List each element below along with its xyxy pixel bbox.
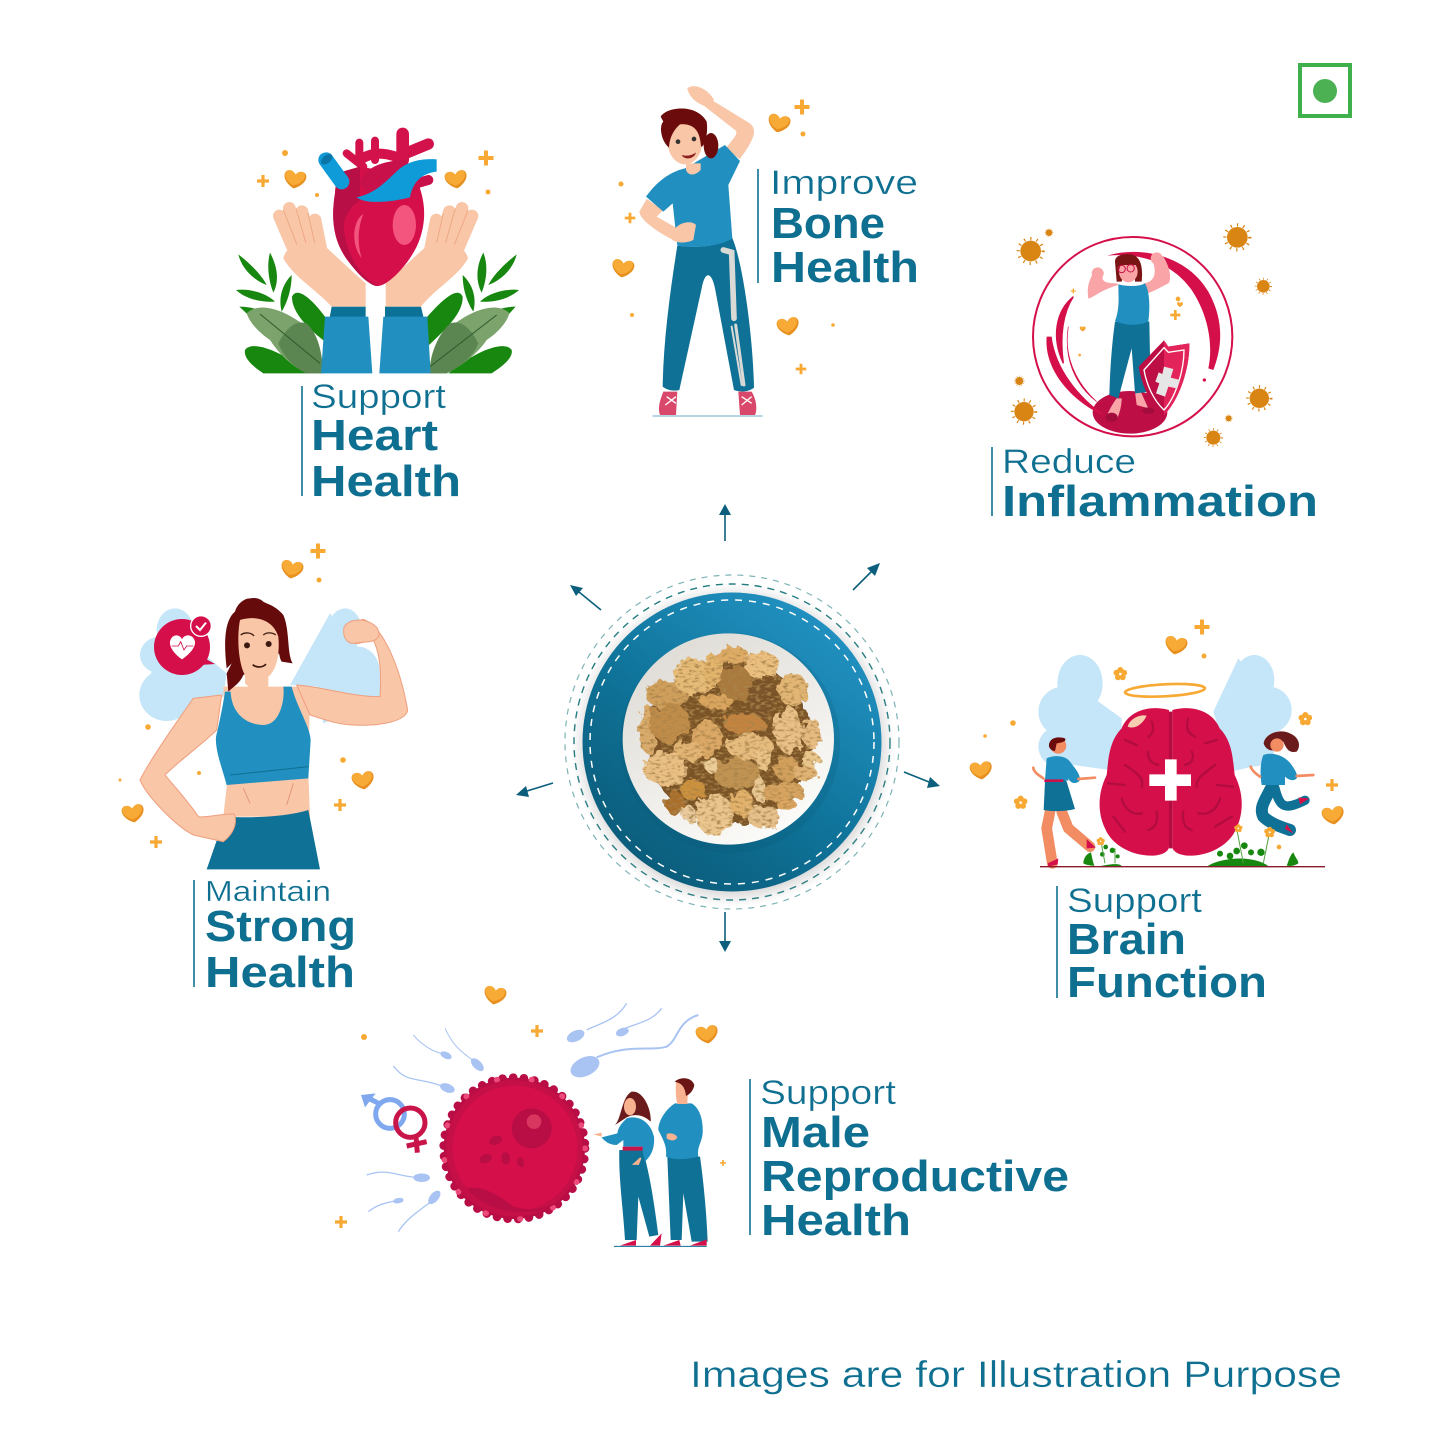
footer note: Images are for Illustration Purpose: [690, 1354, 1342, 1395]
heading: support male reproductive health: [750, 1074, 1069, 1245]
panel: brain function: [969, 620, 1345, 1007]
heading: improve bone health: Improve: [770, 164, 918, 202]
panel: strong health: [118, 544, 408, 997]
heading: reduce inflammation: Reduce: [1002, 443, 1136, 481]
arrows radiating from center: [516, 504, 940, 952]
heading: support male reproductive health: Reproductive: [761, 1152, 1069, 1201]
panel: reduce inflammation: [992, 225, 1318, 526]
heading: support heart health: Health: [311, 457, 461, 506]
plate: [571, 583, 895, 907]
dashed rings: [565, 575, 899, 909]
decorative hearts and sparkles: [611, 100, 835, 374]
bowl with walnuts: [623, 633, 834, 845]
illustration: brain with wings and halo: [1014, 655, 1325, 867]
heading: support heart health: Heart: [311, 411, 438, 460]
heading: support brain function: [1057, 882, 1267, 1007]
heading: improve bone health: Health: [771, 243, 919, 292]
heading: reduce inflammation: [992, 443, 1318, 526]
panel: heart health: [236, 134, 519, 506]
heading: support heart health: [302, 378, 461, 506]
heading: support male reproductive health: Male: [761, 1108, 870, 1157]
illustration: egg cell, sperm, symbols and couple: [361, 1003, 708, 1246]
decorative hearts and sparkles: [257, 150, 494, 197]
heading: support brain function: Support: [1067, 882, 1203, 920]
heading: improve bone health: Bone: [771, 199, 885, 248]
heading: support heart health: Support: [311, 378, 447, 416]
heading: improve bone health: [758, 164, 919, 292]
illustration: hands holding heart: [236, 134, 519, 373]
heading: maintain strong health: [194, 876, 356, 997]
decorative hearts and sparkles: [969, 620, 1345, 826]
heading: support brain function: Brain: [1067, 915, 1186, 964]
heading: maintain strong health: Strong: [205, 902, 356, 951]
heading: maintain strong health: Maintain: [205, 876, 331, 908]
illustration: stretching woman with leg bone: [639, 86, 763, 416]
decorative hearts and sparkles: [118, 544, 375, 848]
heading: support brain function: Function: [1067, 958, 1267, 1007]
center: walnut bowl on blue plate: [516, 504, 940, 952]
icon: vegetarian mark: [1300, 65, 1350, 116]
heading: support male reproductive health: Support: [760, 1074, 897, 1112]
illustration: woman flexing with wings: [139, 598, 408, 869]
panel: male reproductive health: [335, 985, 1069, 1246]
decorative hearts and sparkles: [335, 985, 726, 1228]
heading: reduce inflammation: Inflammation: [1002, 477, 1318, 526]
panel: bone health: [611, 86, 919, 416]
heading: support male reproductive health: Health: [761, 1196, 911, 1245]
illustration: woman with shield inside ring: [1012, 225, 1271, 446]
heading: maintain strong health: Health: [205, 948, 355, 997]
